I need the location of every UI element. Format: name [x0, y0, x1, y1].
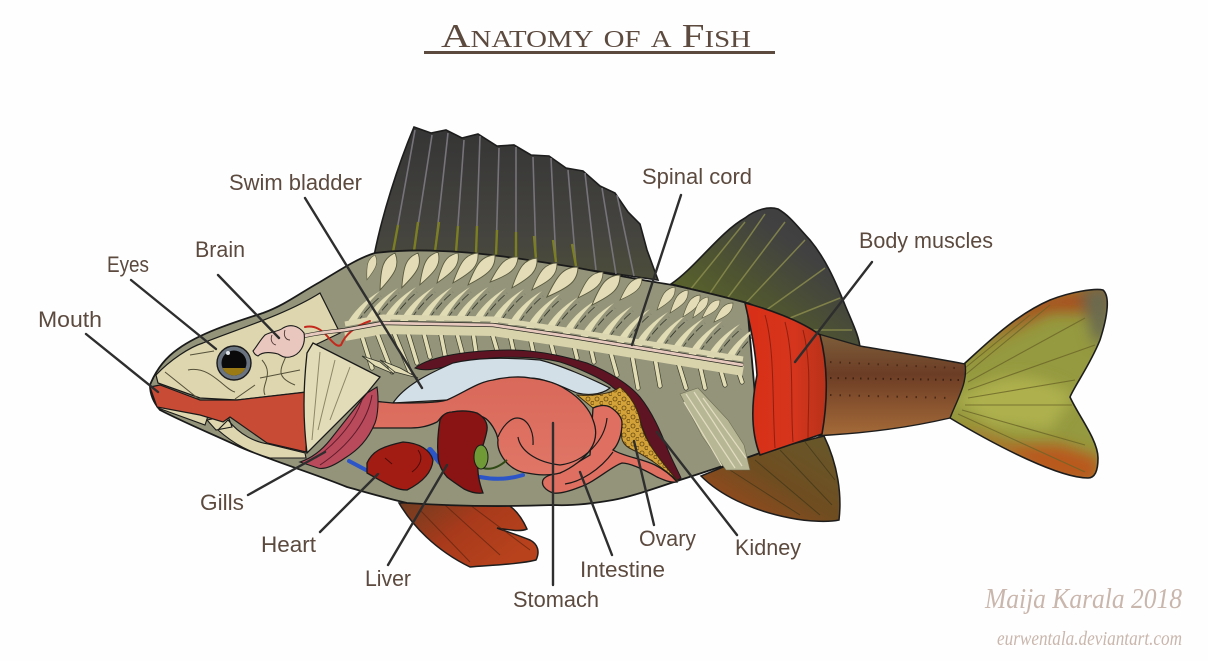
label: Mouth: Mouth — [38, 307, 102, 332]
label: Stomach: Stomach — [513, 587, 599, 612]
label: Gills — [200, 452, 325, 515]
gill cover — [304, 343, 380, 453]
liver — [438, 411, 487, 493]
intestine — [542, 406, 677, 493]
label: Eyes: Eyes — [107, 252, 149, 277]
label: Liver: Liver — [365, 566, 411, 591]
label: Swim bladder: Swim bladder — [229, 170, 362, 195]
body outline — [150, 250, 760, 506]
heart — [367, 442, 433, 490]
eye — [217, 346, 251, 380]
skull bones — [156, 293, 340, 458]
signature: eurwentala.deviantart.com — [997, 628, 1182, 650]
label: Eyes — [107, 252, 216, 349]
spinal cord — [300, 323, 743, 365]
dorsal support bones — [363, 249, 736, 325]
soft dorsal fin — [671, 208, 860, 351]
label: Heart: Heart — [261, 532, 316, 557]
label: Ovary: Ovary — [639, 526, 696, 551]
brain — [253, 326, 304, 357]
gallbladder — [474, 445, 507, 469]
ribs — [360, 328, 742, 388]
neural spines — [346, 287, 759, 360]
label: Intestine — [580, 472, 665, 582]
rear fan bones — [680, 388, 750, 470]
title: Anatomy of a Fish — [441, 18, 751, 55]
label: Liver — [365, 465, 447, 591]
spiny dorsal fin — [374, 127, 658, 280]
stomach — [372, 377, 607, 475]
label: Body muscles: Body muscles — [859, 228, 993, 253]
swim bladder — [393, 358, 610, 403]
label: Heart — [261, 474, 378, 557]
gills — [300, 387, 378, 468]
kidney — [415, 350, 681, 481]
label: Mouth — [38, 307, 158, 392]
anal fin — [701, 436, 840, 521]
label: Spinal cord — [632, 164, 752, 345]
signature — [984, 583, 1182, 650]
label: Brain — [195, 237, 279, 338]
tail fin — [950, 288, 1108, 479]
blood vessels — [305, 321, 523, 479]
fish illustration — [150, 127, 1115, 567]
label: Gills: Gills — [200, 490, 244, 515]
label: Spinal cord: Spinal cord — [642, 164, 752, 189]
label: Brain: Brain — [195, 237, 245, 262]
label: Swim bladder — [229, 170, 422, 388]
pectoral support bones — [362, 356, 418, 378]
signature: Maija Karala 2018 — [984, 583, 1182, 615]
pelvic fin — [399, 502, 538, 567]
tail peduncle — [815, 333, 966, 436]
label: Kidney — [657, 432, 801, 560]
backbone — [345, 317, 743, 371]
body muscles — [745, 303, 826, 455]
mouth and throat — [150, 385, 307, 452]
label: Body muscles — [795, 228, 993, 362]
label: Ovary — [634, 441, 696, 551]
ovary — [577, 387, 678, 481]
label: Kidney: Kidney — [735, 535, 801, 560]
label: Intestine: Intestine — [580, 557, 665, 582]
